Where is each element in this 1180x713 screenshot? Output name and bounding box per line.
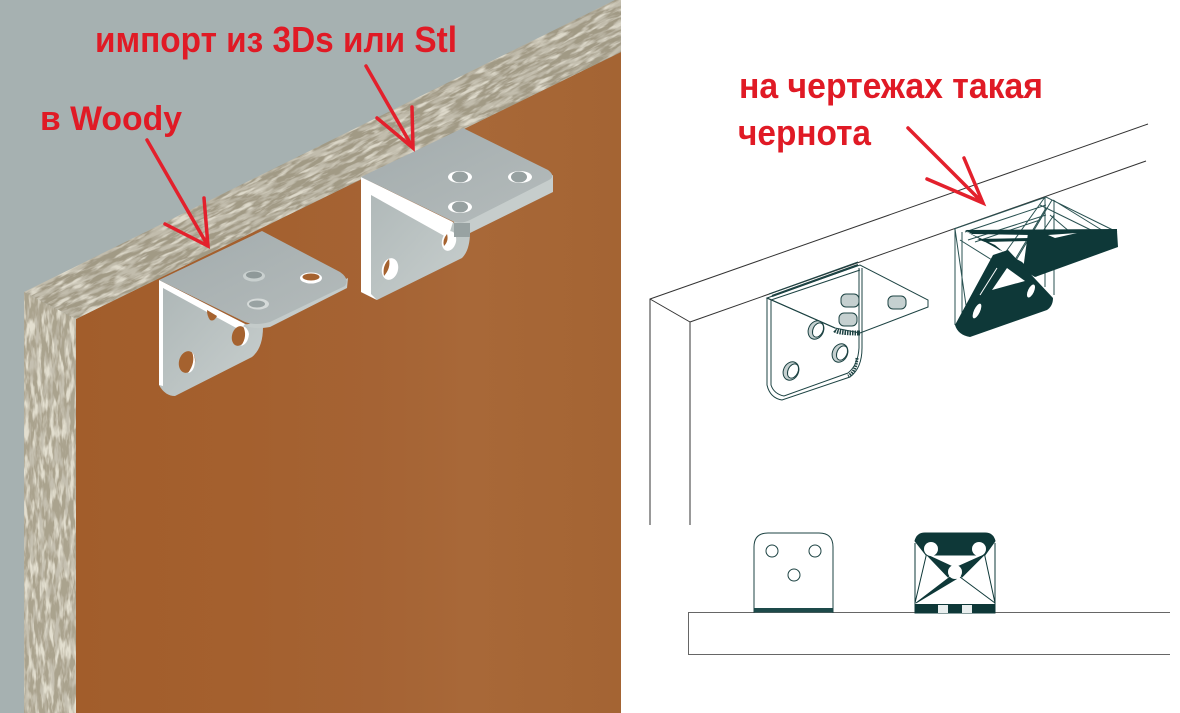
wire holes bbox=[780, 294, 906, 383]
plate side bbox=[453, 175, 553, 233]
dark rays bbox=[927, 555, 955, 577]
dark top bbox=[915, 533, 995, 555]
plate holes bbox=[448, 171, 472, 183]
vertical face bbox=[159, 280, 263, 396]
dark base band bbox=[754, 608, 833, 612]
chipboard top edge bbox=[24, 0, 621, 319]
top plate side bbox=[245, 278, 348, 328]
white notch in top plate bbox=[1048, 233, 1077, 238]
white highlight edges bbox=[159, 280, 245, 386]
bracket: native Woody bbox=[159, 231, 348, 396]
label: in Woody: в Woody bbox=[40, 100, 182, 138]
vertical face holes bbox=[379, 256, 401, 282]
arrow: to Woody bracket bbox=[147, 140, 208, 246]
plate holes bbox=[243, 270, 265, 282]
label: such blackness on drawings, line 1: на чертежах такая bbox=[739, 65, 1043, 106]
wire bracket: native bbox=[767, 262, 928, 400]
dark lower plate mass bbox=[955, 250, 1053, 337]
arrow: to black drawing bbox=[908, 128, 983, 203]
white holes bbox=[924, 542, 938, 556]
top plate bbox=[159, 231, 347, 324]
panel outline in drawing bbox=[650, 124, 1148, 525]
vertical face bbox=[361, 177, 470, 300]
front view: native bracket bbox=[754, 533, 833, 613]
panel: wireframe drawing bbox=[650, 124, 1170, 654]
vertical face holes bbox=[176, 349, 198, 375]
front view: imported bracket bbox=[915, 533, 995, 613]
dark crossing wedge bbox=[965, 231, 1037, 277]
thick white edges bbox=[361, 177, 453, 300]
dark horizontal bands bbox=[965, 229, 1117, 235]
chipboard side edge bbox=[24, 292, 76, 713]
brown panel face bbox=[76, 52, 621, 713]
white inner triangle bbox=[992, 268, 1025, 290]
dark base bbox=[915, 604, 995, 613]
label: such blackness on drawings, line 2: чернота bbox=[738, 112, 872, 153]
white see-through holes bbox=[971, 302, 983, 320]
top plate bbox=[361, 128, 552, 222]
grey background bbox=[0, 0, 621, 713]
label: import from 3Ds or Stl: импорт из 3Ds или Stl bbox=[95, 19, 457, 60]
wire bracket: imported with black triangles bbox=[954, 197, 1118, 337]
panel: Woody 3D render bbox=[0, 0, 621, 713]
bracket: imported 3Ds / Stl bbox=[361, 128, 553, 300]
front view base board bbox=[688, 612, 1170, 654]
dark top plate mass bbox=[1023, 231, 1118, 277]
arrow: to imported bracket bbox=[366, 66, 413, 148]
